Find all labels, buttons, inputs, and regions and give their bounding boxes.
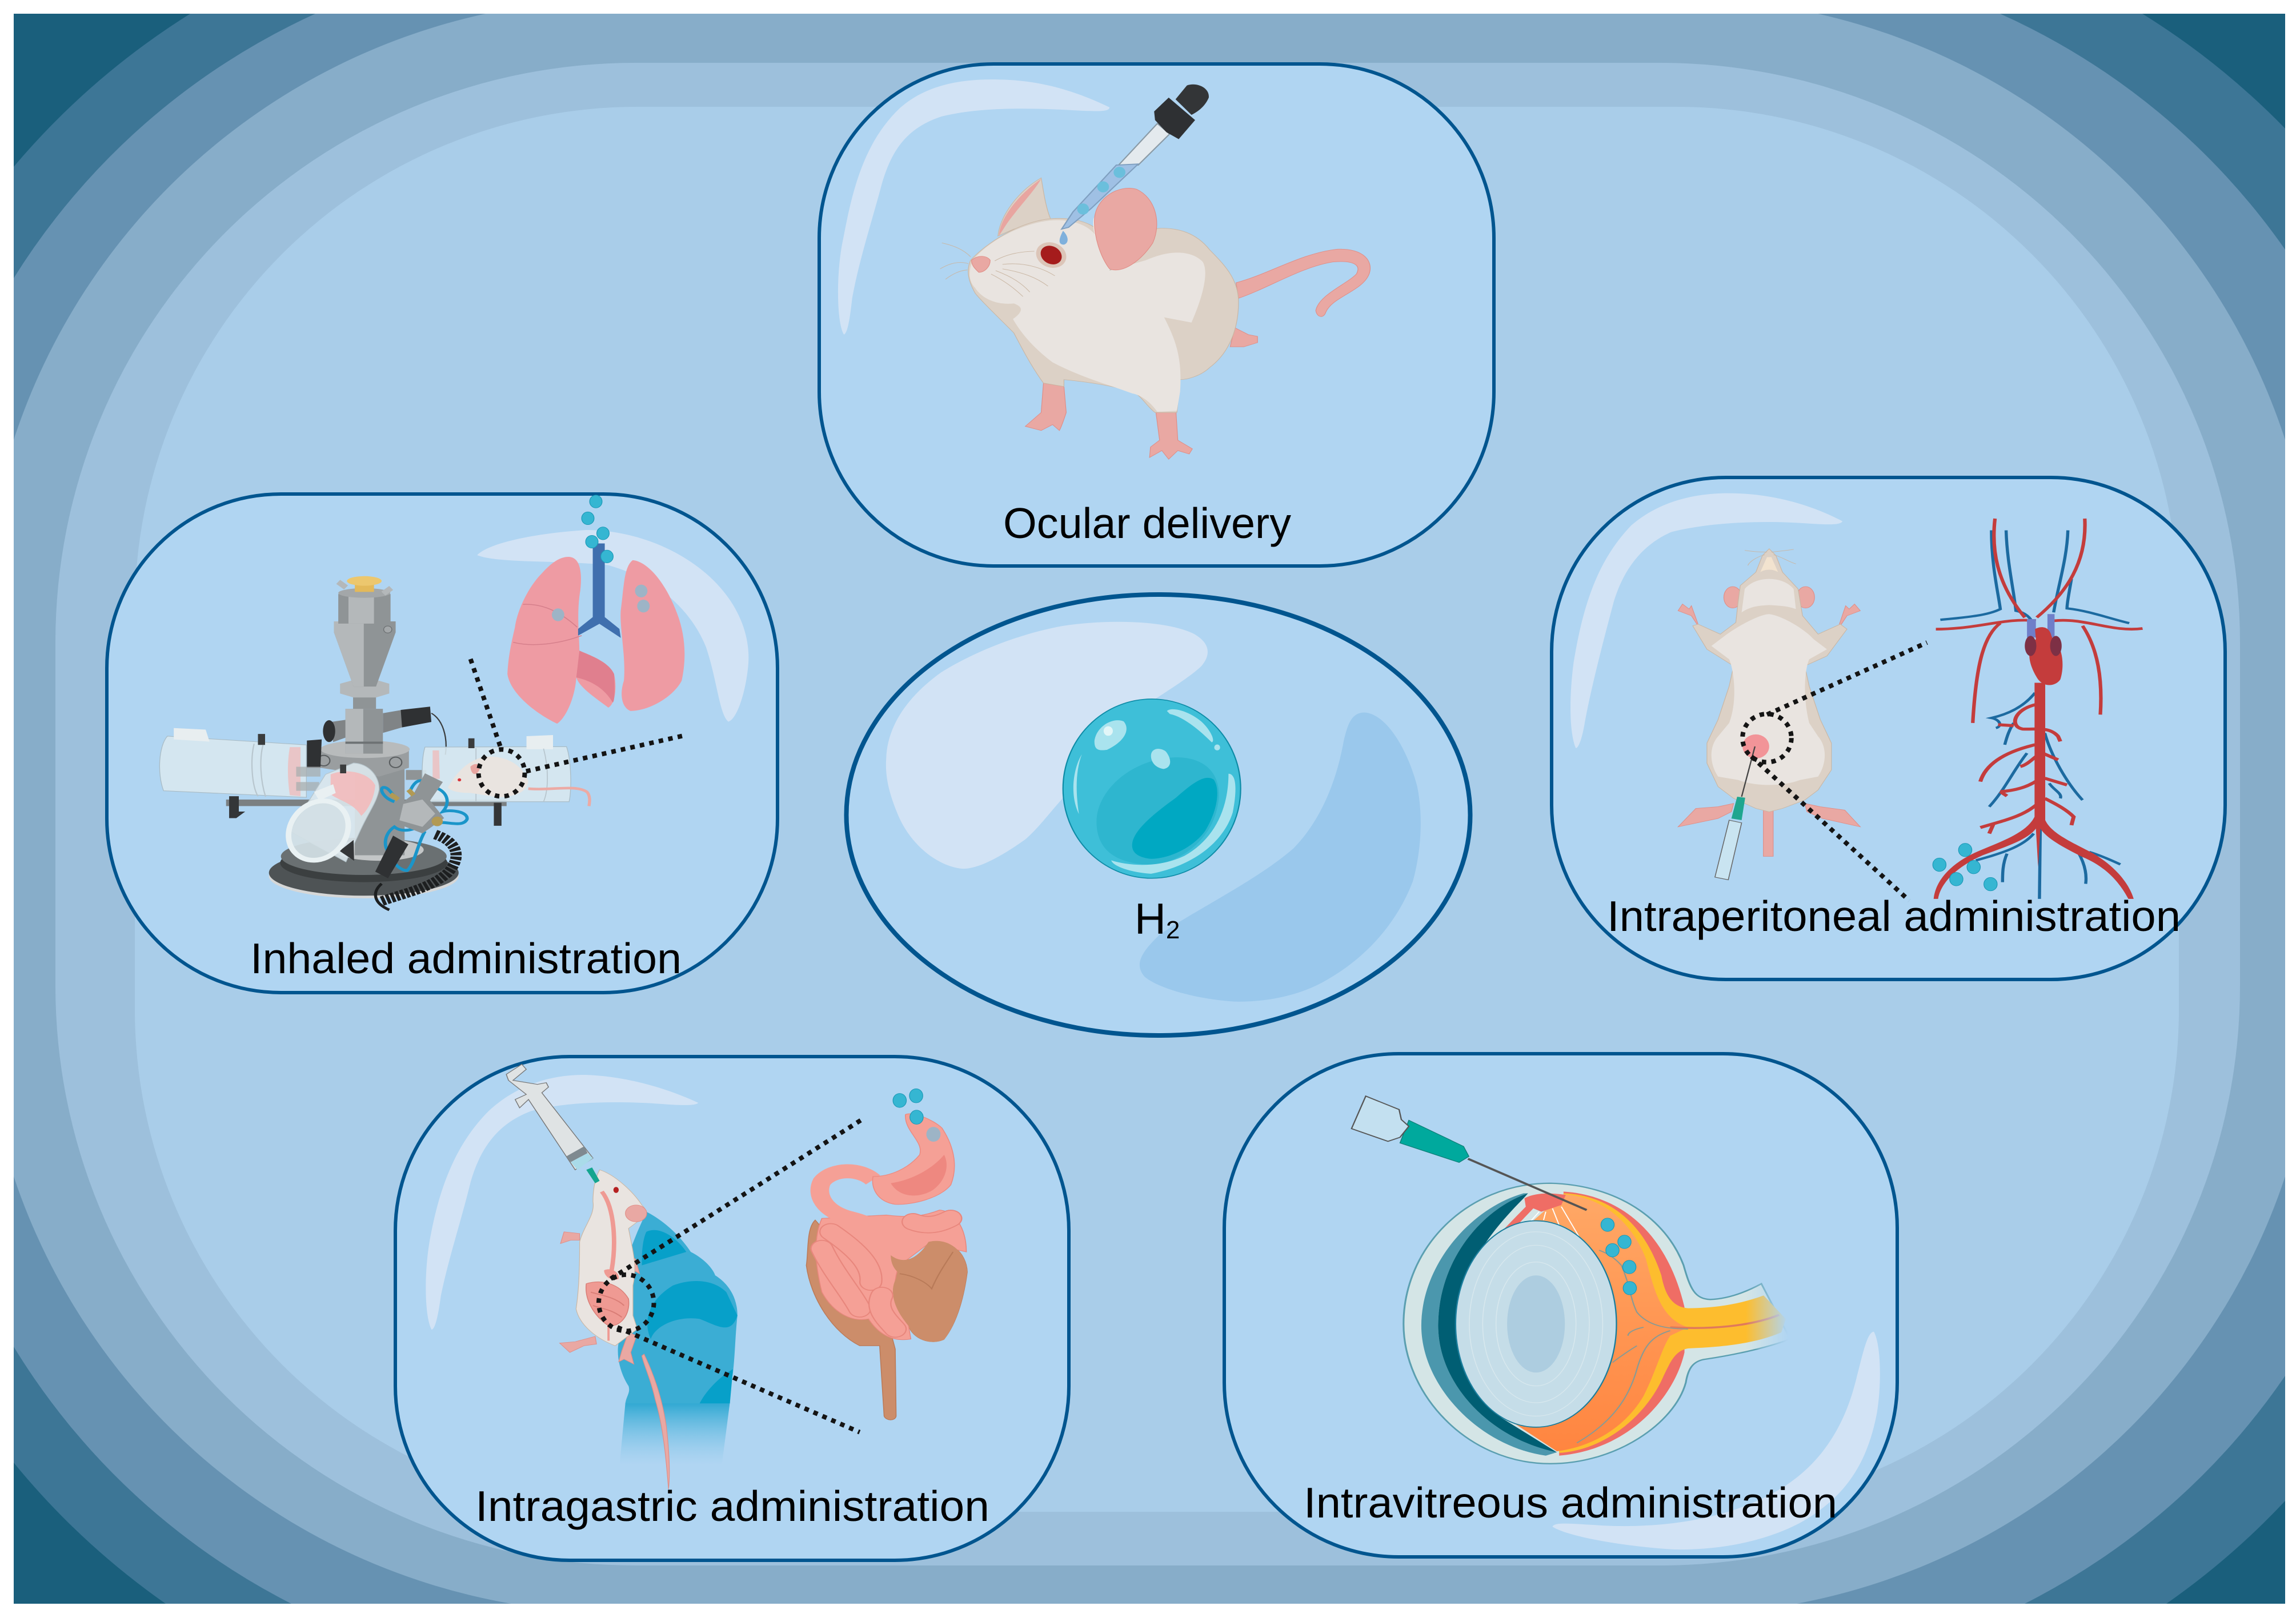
syringe bbox=[1715, 746, 1755, 880]
needle bbox=[1352, 1096, 1586, 1210]
hydrogen bubbles bbox=[590, 495, 602, 508]
panel: intravitreous administration bbox=[1224, 1054, 1897, 1557]
label: intraperitoneal administration: Intraperitoneal administration bbox=[1607, 892, 2181, 940]
panel: central hydrogen bubble bbox=[847, 595, 1470, 1035]
label: ocular delivery: Ocular delivery bbox=[1003, 499, 1292, 547]
rat bbox=[642, 1354, 670, 1489]
veins bbox=[1940, 531, 2129, 899]
label: inhaled administration: Inhaled administration bbox=[250, 934, 682, 982]
heart bbox=[2025, 614, 2062, 685]
ocular illustration: mouse with dropper bbox=[838, 79, 1370, 459]
dotted zoom callout bbox=[599, 1275, 654, 1331]
column and side ports bbox=[331, 718, 359, 742]
inhaled illustration: exposure device bbox=[159, 576, 590, 910]
dotted zoom callout bbox=[479, 749, 525, 796]
icon: hydrogen sphere bbox=[1063, 699, 1241, 878]
intravitreous illustration: eye and needle bbox=[1352, 1096, 1880, 1549]
H2 illustration bbox=[886, 622, 1421, 1002]
injection site glow bbox=[1742, 734, 1769, 758]
eye: choroid bbox=[1559, 1191, 1685, 1456]
thin wire bbox=[431, 713, 446, 754]
coiled cable bbox=[382, 834, 456, 901]
right tube with mouse bbox=[422, 746, 571, 802]
rat bbox=[1764, 810, 1773, 856]
label: intragastric administration: Intragastric administration bbox=[475, 1482, 989, 1530]
pump and hoses bbox=[382, 781, 467, 870]
gut: large intestine bbox=[806, 1220, 967, 1420]
inhaled highlight bbox=[477, 530, 748, 722]
panel: ocular delivery bbox=[819, 64, 1494, 566]
rods and supports bbox=[226, 800, 507, 806]
dotted zoom callout bbox=[1742, 714, 1792, 762]
eye: ciliary body bbox=[1466, 1194, 1566, 1274]
left tube bbox=[159, 736, 306, 797]
intragastric illustration: hand, rat, syringe and gut bbox=[426, 1064, 967, 1489]
eye: outer sclera bbox=[1404, 1183, 1790, 1464]
icon: dropper bbox=[1060, 85, 1209, 244]
gut: small intestine bbox=[816, 1210, 967, 1340]
eye: retina and optic nerve bbox=[1559, 1193, 1786, 1453]
arteries bbox=[1936, 519, 2142, 723]
panel: inhaled administration bbox=[107, 494, 778, 993]
panel: intragastric administration bbox=[395, 1057, 1069, 1560]
eye: lens bbox=[1456, 1220, 1617, 1427]
gut: coiled loops bbox=[822, 1218, 951, 1329]
eye: vitreous bbox=[1506, 1194, 1688, 1451]
front tube bbox=[290, 763, 379, 862]
label: H2: H bbox=[1135, 895, 1166, 943]
inhaled illustration: callout and lungs bbox=[471, 495, 686, 796]
cyclone funnel bbox=[334, 621, 396, 686]
hydrogen bubbles bbox=[893, 1094, 906, 1107]
intraperitoneal illustration: rat, syringe and vasculature bbox=[1570, 493, 2142, 901]
gut: duodenum and stomach bbox=[820, 1171, 906, 1254]
panel: intraperitoneal administration bbox=[1552, 477, 2225, 979]
hydrogen bubbles bbox=[1958, 844, 1972, 857]
device base bbox=[269, 854, 459, 898]
label: H2: 2 bbox=[1166, 916, 1180, 944]
syringe bbox=[506, 1064, 600, 1183]
label: intravitreous administration: Intravitreous administration bbox=[1304, 1479, 1837, 1527]
central body bbox=[355, 759, 404, 856]
lungs bbox=[507, 557, 615, 724]
eye: cornea layers bbox=[1421, 1193, 1557, 1456]
hydrogen bubbles bbox=[1601, 1218, 1614, 1231]
blue gloved hand bbox=[618, 1212, 738, 1465]
